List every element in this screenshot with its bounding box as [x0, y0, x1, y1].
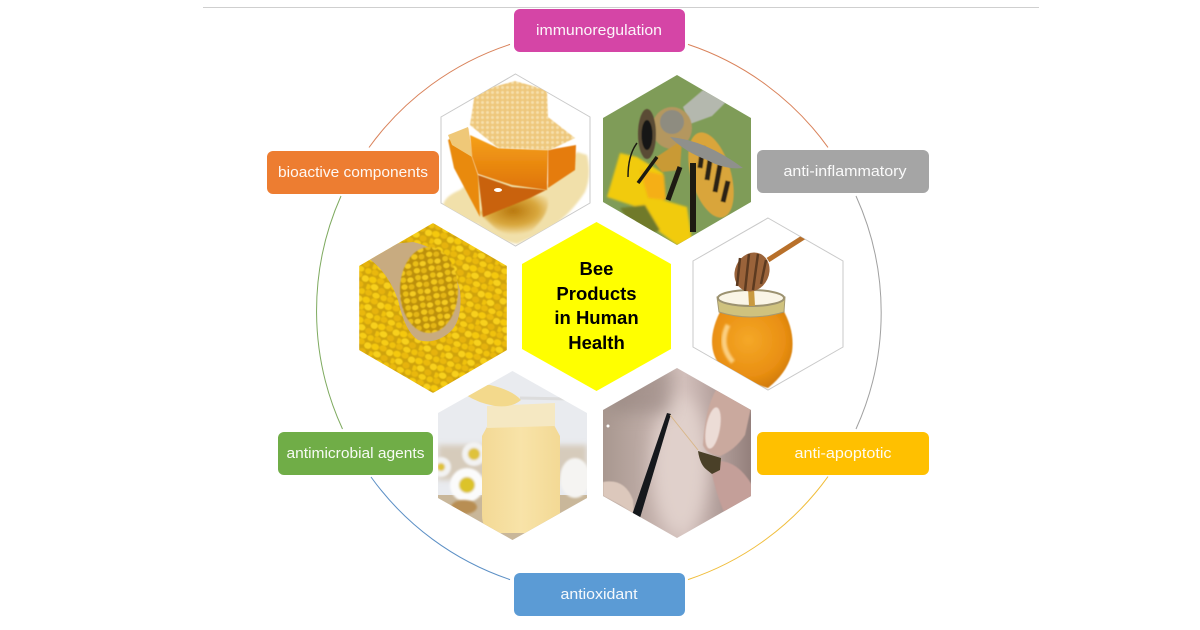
jar body [712, 308, 793, 388]
label: immunoregulation: immunoregulation [536, 22, 662, 39]
hexagon photo: bee pollen on spoon [359, 223, 507, 393]
spoon [466, 385, 521, 406]
dipper head [734, 252, 770, 292]
daisies [431, 442, 590, 502]
label: anti-apoptotic: anti-apoptotic [794, 445, 892, 462]
hexagon photo: honey jar [693, 218, 843, 390]
jar rim [718, 290, 784, 306]
hexagon photo: honeycomb [441, 74, 590, 246]
label: antioxidant: antioxidant [560, 586, 638, 603]
label: anti-apoptotic [757, 432, 929, 475]
tweezers [632, 413, 671, 518]
label: bioactive components: bioactive components [278, 164, 428, 181]
label: anti-inflammatory [757, 150, 929, 193]
dipper handle [768, 237, 804, 260]
arc: bioactive to immunoregulation [369, 44, 510, 148]
arc: immunoregulation to anti-inflammatory [688, 44, 828, 147]
top rule [203, 6, 1039, 8]
label: antioxidant [514, 573, 685, 616]
finger top [703, 388, 752, 456]
flower [607, 153, 692, 245]
body [638, 106, 734, 218]
hexagon photo: bee on flower [603, 75, 751, 245]
finger bottom-left [603, 481, 634, 514]
spoon pollen [400, 247, 458, 333]
label: immunoregulation [514, 9, 685, 52]
jar [482, 425, 560, 533]
title text: Products [556, 283, 637, 304]
cycle ring [317, 44, 881, 580]
label: antimicrobial agents: antimicrobial agents [286, 445, 424, 462]
spoon [368, 242, 461, 341]
wing [670, 137, 743, 168]
hexagon photo: royal jelly jar [431, 371, 590, 545]
arc: anti-inflammatory to anti-apoptotic [856, 196, 881, 429]
label: bioactive components [267, 151, 439, 194]
title text: Bee [580, 258, 613, 279]
label: antimicrobial agents [278, 432, 433, 475]
upper wing [683, 90, 727, 124]
jar neck [716, 296, 786, 318]
arc: antioxidant to antimicrobial [371, 477, 510, 580]
bee [698, 451, 721, 474]
legs [690, 163, 696, 232]
venom thread [670, 415, 698, 450]
honey stream [748, 291, 755, 306]
arc: antimicrobial to bioactive [317, 196, 342, 429]
thumb [712, 461, 751, 512]
title text: Health [568, 332, 625, 353]
center hexagon [522, 222, 671, 391]
arc: anti-apoptotic to antioxidant [688, 477, 828, 580]
label: anti-inflammatory: anti-inflammatory [784, 163, 907, 180]
hexagon photo: bee venom extraction [603, 368, 752, 538]
title text: in Human [554, 307, 639, 328]
